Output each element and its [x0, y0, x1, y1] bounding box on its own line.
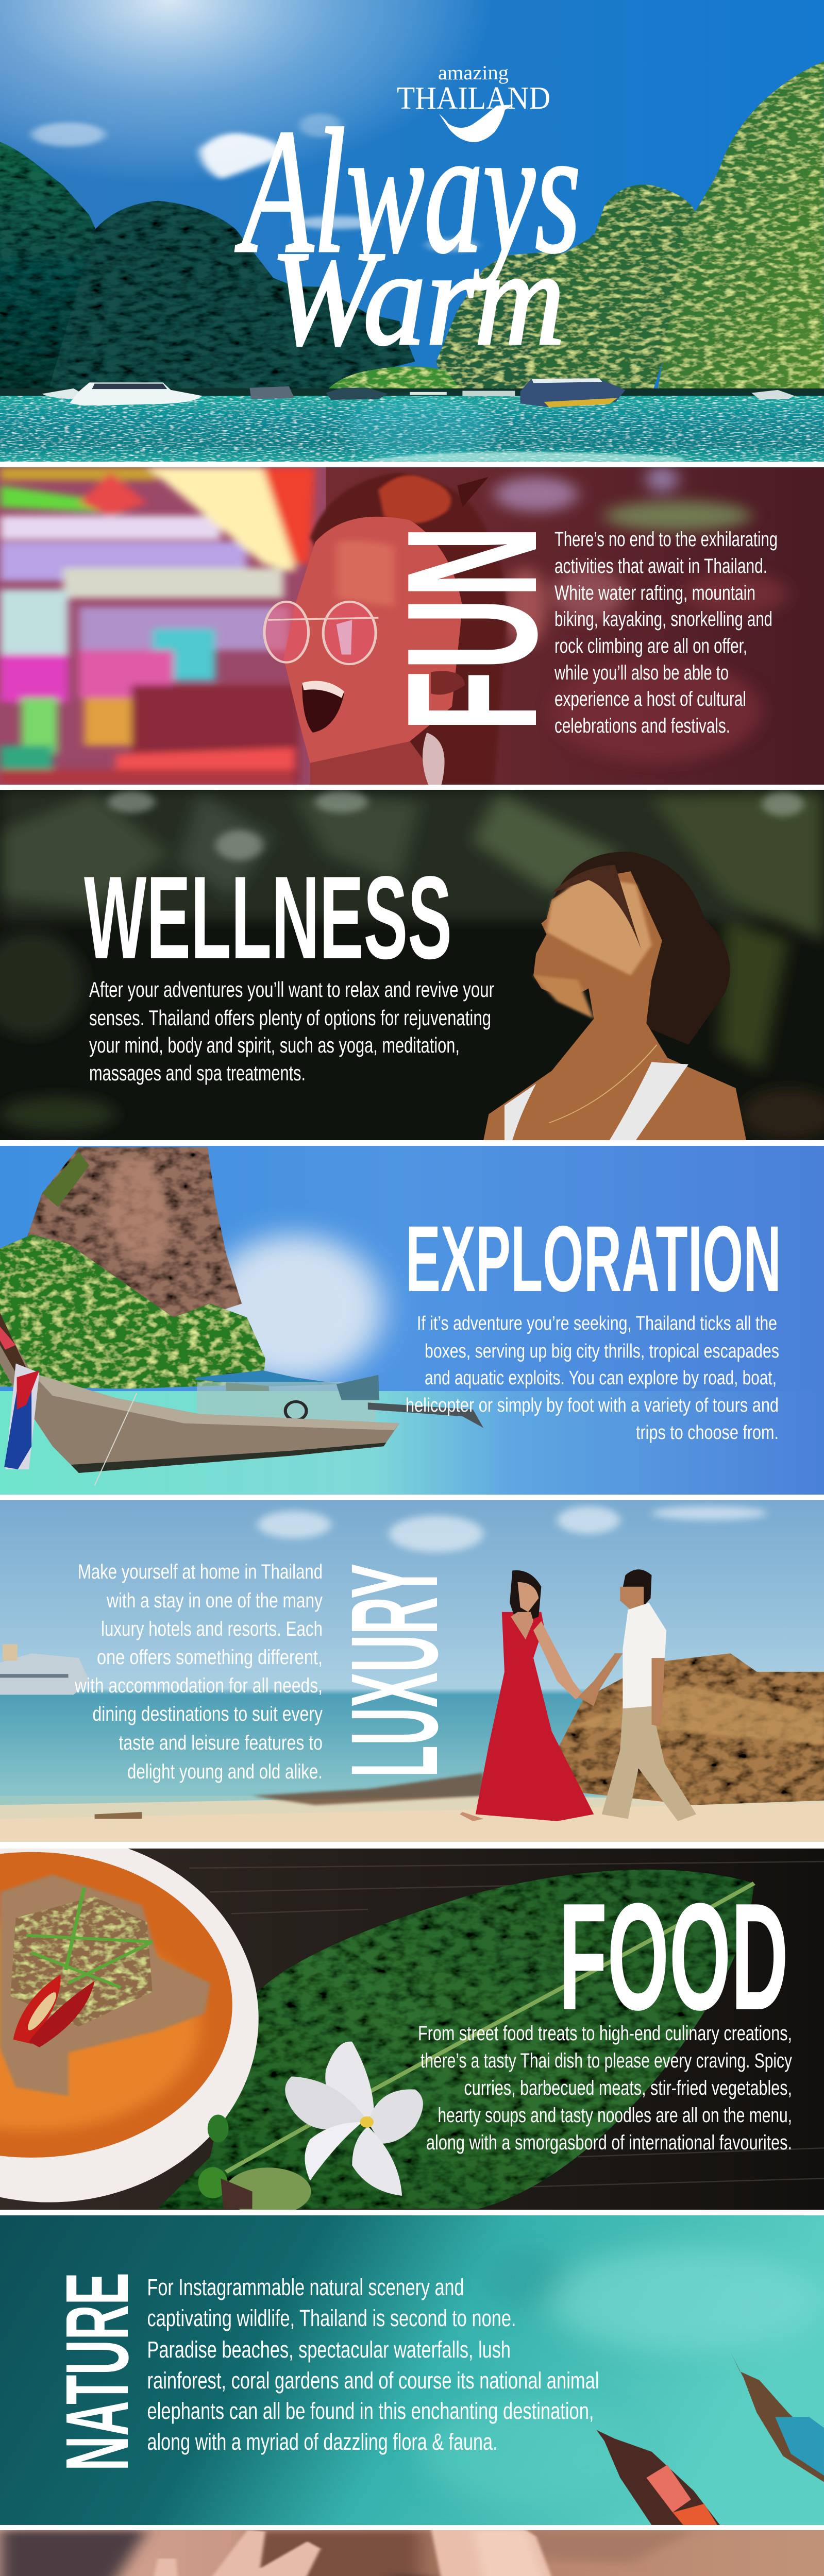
panel: wellness	[0, 790, 824, 1140]
photo: woman relaxing among palms	[0, 790, 824, 1140]
panel: luxury	[0, 1500, 824, 1842]
text block: nature description: Paradise beaches, spectacular waterfalls, lush	[147, 2336, 511, 2363]
text block: nature description: along with a myriad of dazzling flora & fauna.	[147, 2429, 498, 2455]
text block: wellness description	[89, 977, 494, 1085]
title: Always Warm: Always	[234, 93, 581, 290]
text block: wellness description: After your adventures you’ll want to relax and revive your	[89, 977, 494, 1002]
text block: exploration description	[406, 1313, 779, 1444]
text block: luxury description: delight young and old alike.	[127, 1760, 323, 1783]
heading: WELLNESS: WELLNESS	[84, 852, 452, 984]
text block: luxury description: luxury hotels and resorts. Each	[101, 1618, 323, 1640]
text block: wellness description: your mind, body and spirit, such as yoga, meditation,	[89, 1033, 460, 1057]
logo: amazing Thailand: THAILAND	[397, 81, 550, 116]
photo: longtail boat and limestone rock	[0, 1146, 824, 1495]
text block: nature description: elephants can all be found in this enchanting destination,	[147, 2398, 594, 2424]
text block: nature description: captivating wildlife, Thailand is second to none.	[147, 2305, 516, 2331]
text block: luxury description: Make yourself at home in Thailand	[78, 1561, 323, 1583]
panel: luxury: LUXURY	[325, 1564, 463, 1777]
text block: luxury description: dining destinations to suit every	[93, 1703, 323, 1725]
panel: hero	[0, 0, 824, 463]
text block: fun description: experience a host of cultural	[554, 688, 746, 710]
text block: exploration description: trips to choose from.	[636, 1422, 779, 1444]
logo: amazing Thailand: amazing	[438, 62, 509, 84]
heading: NATURE: NATURE	[47, 2273, 147, 2471]
text block: wellness description: senses. Thailand offers plenty of options for rejuvenating	[89, 1006, 491, 1030]
panel: fun	[0, 466, 824, 785]
text block: fun description	[554, 528, 778, 737]
panel: love	[0, 2529, 824, 2576]
text block: fun description: rock climbing are all on offer,	[554, 635, 747, 657]
text block: nature description	[147, 2274, 599, 2455]
panel: nature	[0, 2215, 824, 2525]
panel: exploration	[0, 1146, 824, 1495]
text block: food description	[418, 2022, 792, 2154]
title: Always Warm: Warm	[271, 224, 565, 373]
text block: luxury description: one offers something different,	[97, 1646, 323, 1669]
text block: nature description: rainforest, coral gardens and of course its national animal	[147, 2367, 599, 2394]
text block: luxury description: with accommodation for all needs,	[74, 1674, 323, 1697]
text block: luxury description	[74, 1561, 323, 1783]
text block: luxury description: taste and leisure features to	[119, 1732, 323, 1754]
panel: food	[0, 1835, 824, 2215]
photo: aerial turquoise sea with longtail boats	[0, 2215, 824, 2525]
text block: luxury description: with a stay in one of the many	[106, 1589, 323, 1612]
photo: woman laughing in neon lights	[0, 467, 824, 785]
photo: curry bowl, banana leaf and white flower	[0, 1849, 824, 2210]
text block: fun description: White water rafting, mountain	[554, 582, 755, 604]
photo: hands forming a heart shape	[0, 2530, 824, 2576]
heading: FUN: FUN	[368, 526, 576, 732]
logo: amazing Thailand	[397, 62, 550, 142]
photo: couple walking on the beach	[0, 1500, 824, 1842]
text block: wellness description: massages and spa treatments.	[89, 1061, 306, 1085]
title: Always Warm	[234, 93, 581, 373]
text block: fun description: celebrations and festivals.	[554, 715, 730, 737]
text block: nature description: For Instagrammable natural scenery and	[147, 2274, 464, 2300]
text block: fun description: while you’ll also be able to	[554, 662, 729, 684]
